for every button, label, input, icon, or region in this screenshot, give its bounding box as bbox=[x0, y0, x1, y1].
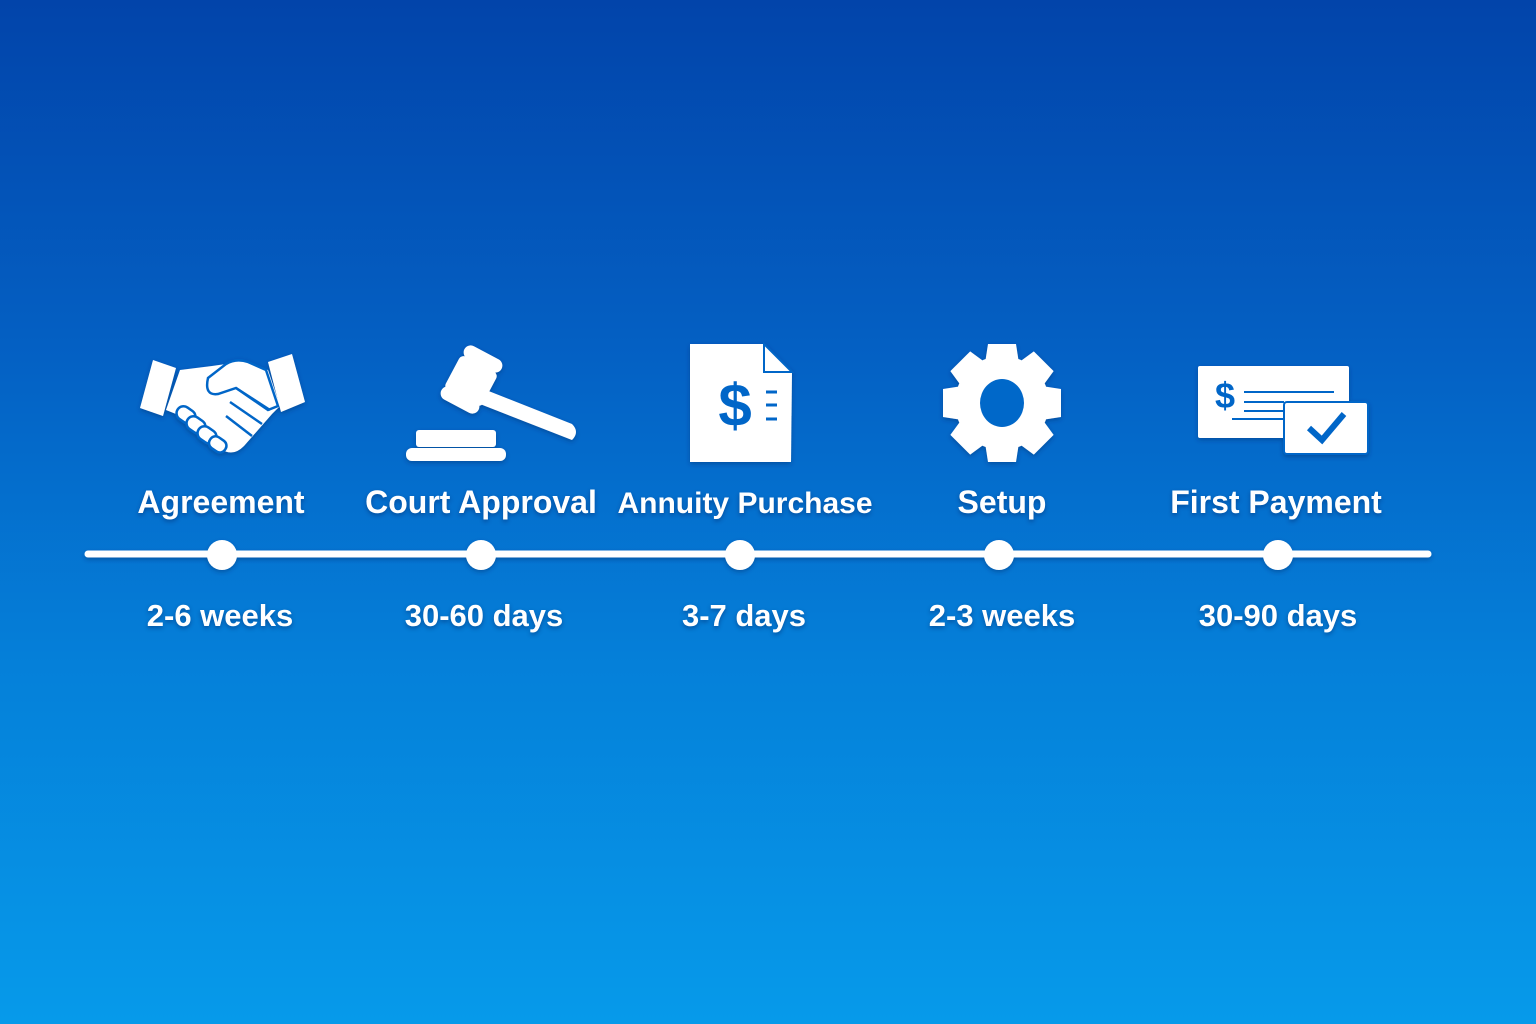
label: Agreement: Agreement bbox=[137, 484, 305, 520]
icon: handshake bbox=[140, 354, 305, 455]
duration: 30-60 days: 30-60 days bbox=[405, 598, 563, 633]
label: First Payment: First Payment bbox=[1170, 484, 1382, 520]
label: Court Approval: Court Approval bbox=[365, 484, 597, 520]
icon: document with dollar bbox=[690, 344, 792, 462]
icon: document with dollar: $ bbox=[718, 372, 752, 439]
label: Annuity Purchase: Annuity Purchase bbox=[617, 487, 873, 520]
icon: check payment: $ bbox=[1215, 375, 1235, 416]
duration: 2-3 weeks: 2-3 weeks bbox=[929, 598, 1075, 633]
icon: gear bbox=[943, 344, 1061, 462]
duration: 30-90 days: 30-90 days bbox=[1199, 598, 1357, 633]
timeline dots bbox=[207, 540, 1293, 570]
icon: check payment bbox=[1198, 366, 1368, 454]
label: Setup: Setup bbox=[958, 484, 1046, 520]
duration: 2-6 weeks: 2-6 weeks bbox=[147, 598, 293, 633]
duration: 3-7 days: 3-7 days bbox=[682, 598, 806, 633]
timeline line bbox=[88, 540, 1428, 570]
icon: gavel bbox=[406, 343, 576, 461]
